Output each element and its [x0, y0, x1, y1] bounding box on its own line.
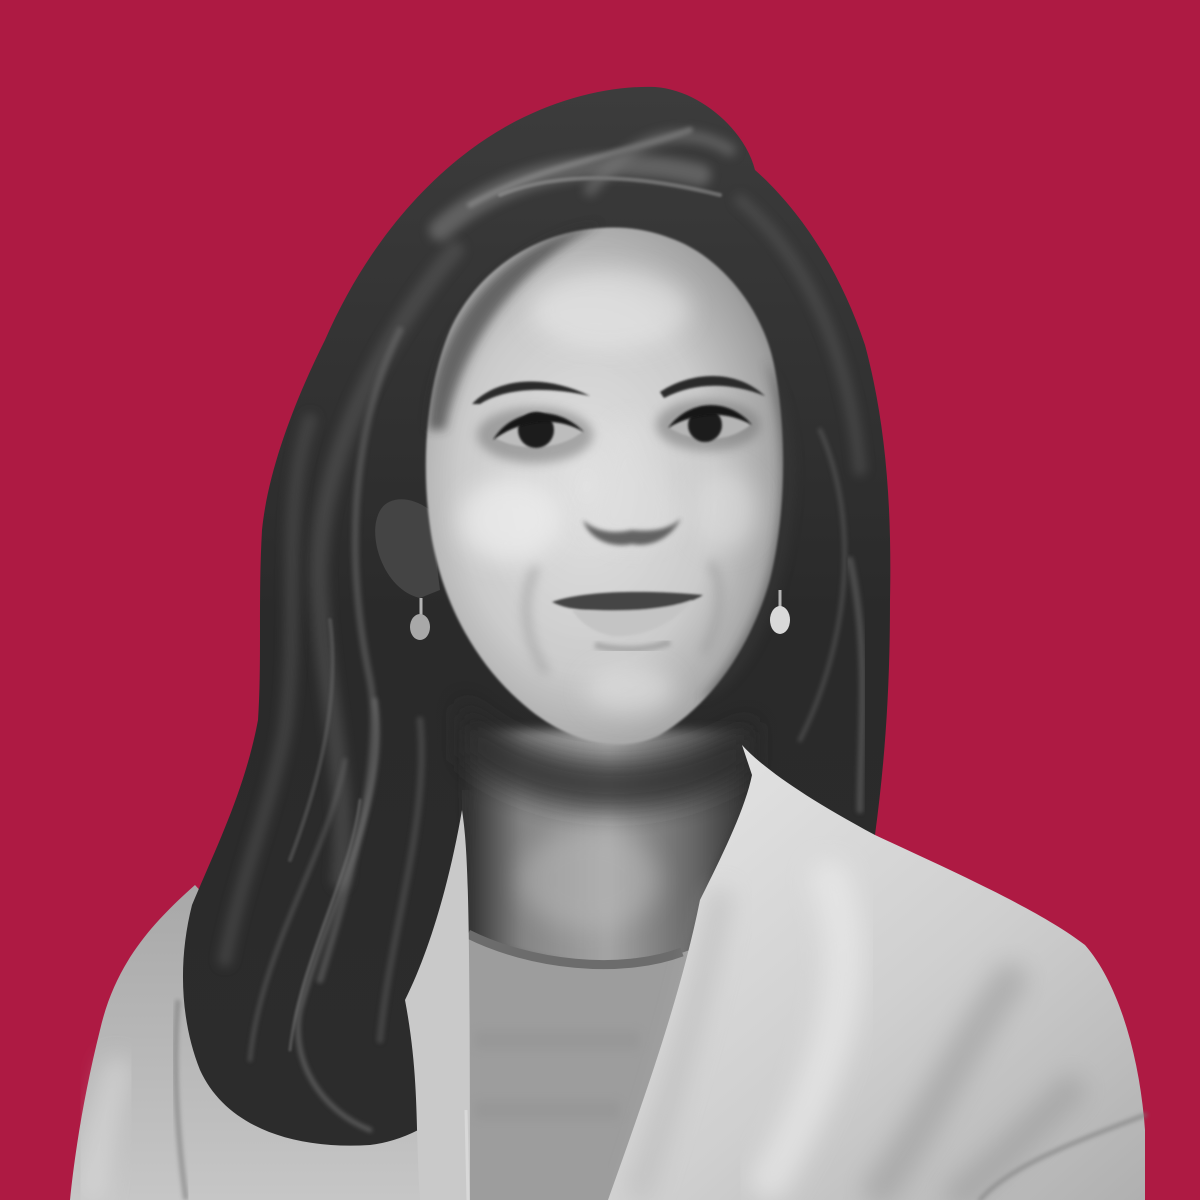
cardigan right body	[608, 745, 1145, 1200]
cardigan folds	[640, 880, 1145, 1200]
face	[426, 227, 783, 745]
shadow under lower lip	[595, 642, 670, 649]
mouth	[552, 592, 703, 636]
neck shadow under chin	[462, 700, 752, 810]
hair strands	[225, 130, 862, 1130]
neck backing	[462, 790, 752, 1200]
cheek highlights	[460, 270, 757, 714]
eyebrow right	[660, 376, 765, 398]
grey t-shirt	[466, 932, 720, 1200]
left sleeve and shoulder	[70, 885, 470, 1200]
hair edge shadow on forehead	[428, 224, 600, 430]
eyebrow left	[472, 382, 590, 404]
earring left	[410, 598, 430, 640]
necklace	[466, 1110, 468, 1200]
eye left	[477, 407, 593, 463]
face right shadow	[700, 360, 795, 700]
cardigan left lapel	[405, 810, 470, 1200]
neck	[466, 730, 752, 975]
collarbone highlight	[520, 830, 660, 930]
eye right	[656, 399, 760, 451]
ear left	[375, 499, 440, 598]
earring right	[770, 590, 790, 634]
nose	[582, 420, 682, 546]
smile lines	[526, 565, 719, 670]
hair back mass	[183, 87, 890, 1146]
